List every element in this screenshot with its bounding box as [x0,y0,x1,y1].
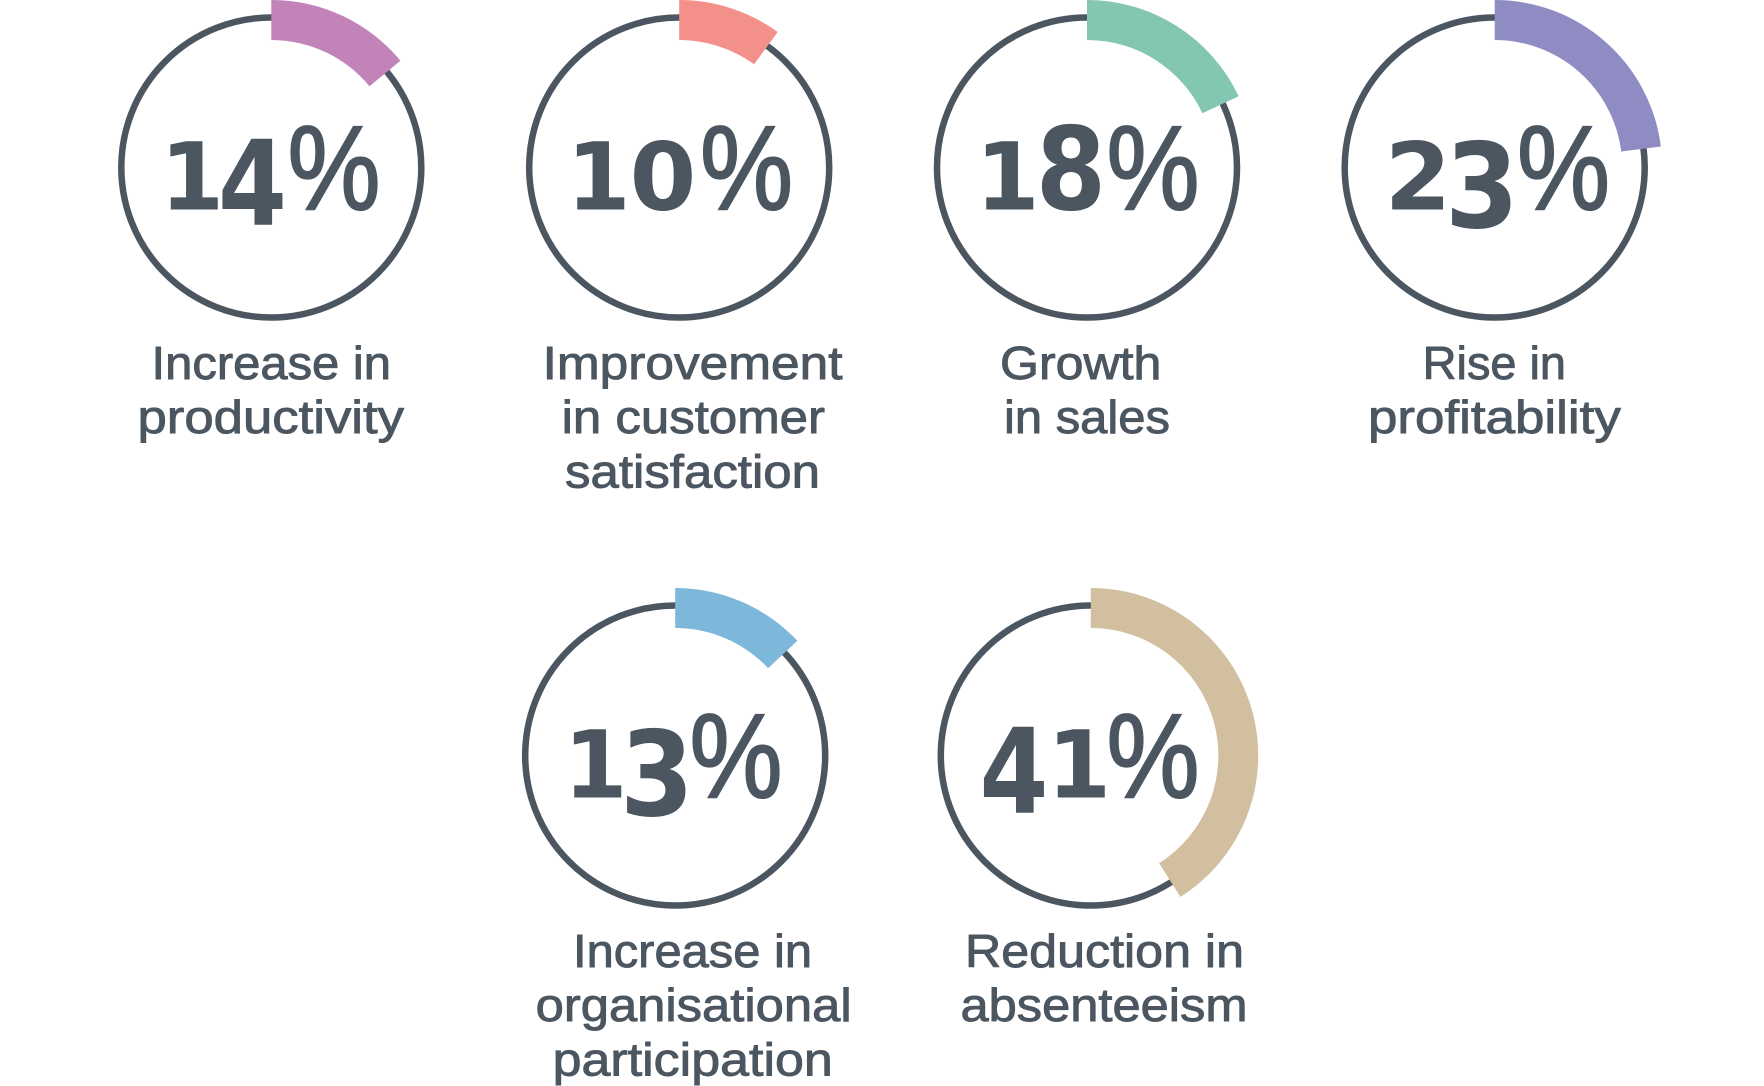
label: absenteeism [960,979,1248,1031]
value 23% [1385,101,1610,256]
value 41%: 4 [980,703,1048,841]
value 10%: 0 [630,123,696,232]
value 18%: 8 [1036,102,1106,237]
value 13% [563,689,782,844]
label [138,337,404,443]
label [1000,337,1170,443]
value 10% [566,101,793,235]
stat: 13% increase in organisational participation [525,588,852,1086]
label: productivity [138,391,404,443]
value 13%: 1 [563,711,628,820]
label [536,925,852,1086]
value 41% [980,689,1199,841]
value 23%: 2 [1385,123,1451,232]
label: Rise in [1423,337,1566,389]
label: Improvement [543,337,843,389]
label [543,337,843,498]
ring with periwinkle arc [1345,0,1661,318]
label [960,925,1248,1031]
value 41%: 1 [1047,711,1111,820]
ring with salmon arc [529,0,829,318]
value 13%: % [690,689,782,823]
label: Increase in [152,337,391,389]
label: Increase in [573,925,812,977]
ring with blue arc [525,588,825,906]
stat: 14% increase in productivity [121,0,421,443]
label: Reduction in [965,925,1244,977]
ring with green arc [937,0,1239,318]
ring with purple arc [121,0,421,317]
label [1368,337,1621,443]
value 13%: 3 [620,707,694,844]
value 10%: 1 [566,123,631,232]
value 14%: 1 [160,123,224,232]
value 23%: % [1517,101,1610,235]
stat: 23% rise in profitability [1345,0,1661,443]
value 18% [975,101,1199,237]
value 14%: % [288,101,380,235]
label: participation [553,1034,833,1086]
value 23%: 3 [1445,119,1519,256]
value 10%: % [700,101,793,235]
label: profitability [1368,391,1621,443]
label: organisational [536,979,852,1031]
label: Growth [1000,337,1161,389]
label: in sales [1004,391,1170,443]
value 41%: % [1107,689,1199,823]
stat: 41% reduction in absenteeism [941,588,1258,1031]
label: in customer [562,391,825,443]
stat: 10% improvement in customer satisfaction [529,0,843,498]
ring with tan arc [941,588,1258,906]
value 18%: 1 [975,123,1040,232]
value 14%: 4 [218,115,287,253]
label: satisfaction [565,446,820,498]
stat: 18% growth in sales [937,0,1239,443]
value 18%: % [1107,101,1199,235]
value 14% [160,101,380,253]
